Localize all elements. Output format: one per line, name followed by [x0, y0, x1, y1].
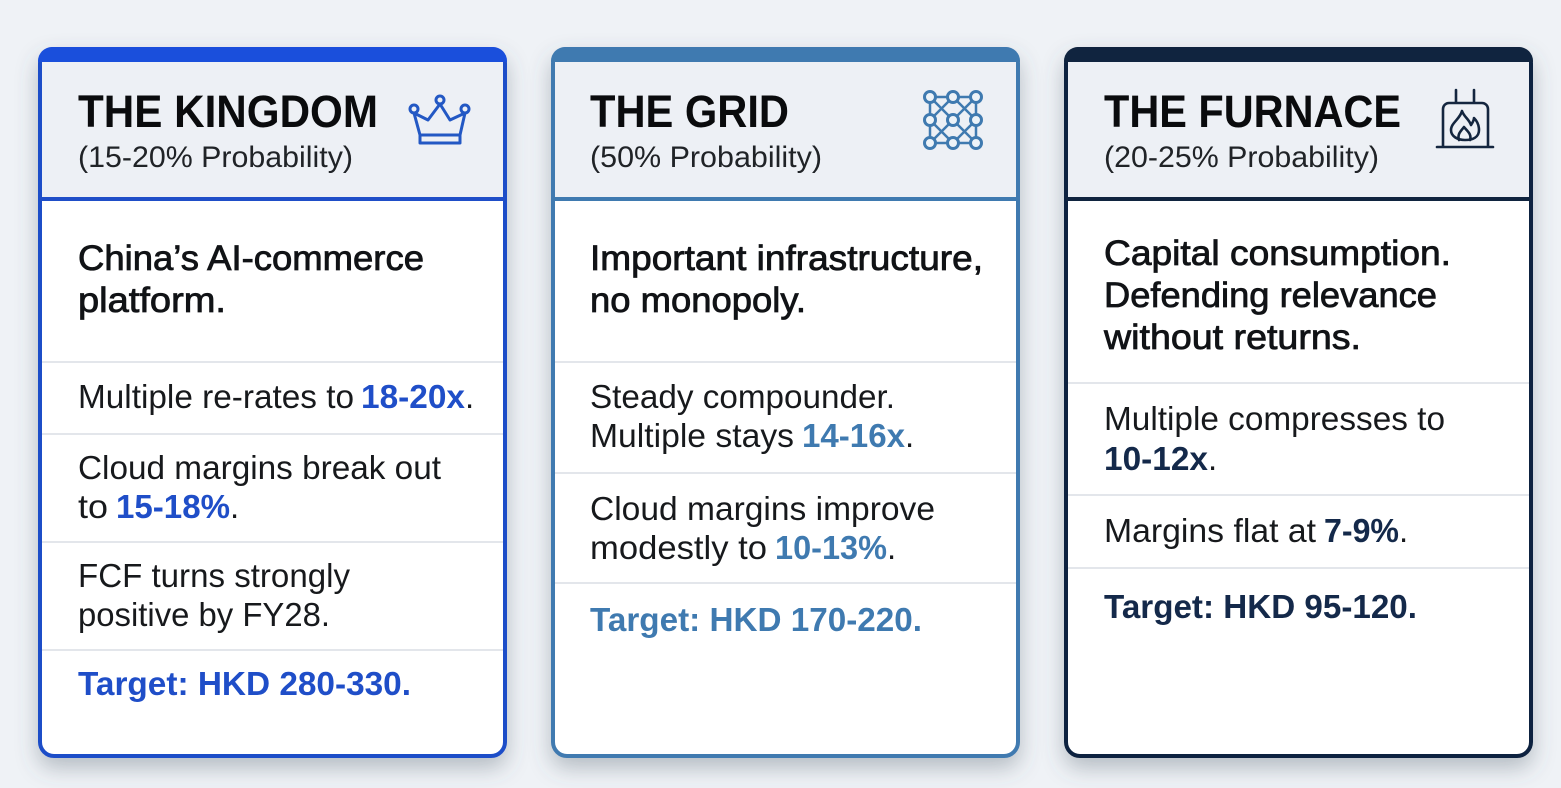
text: Grid target: Target: HKD 170-220. — [590, 601, 922, 638]
text: Furnace thesis — [1103, 234, 1451, 357]
text: Furnace multiple: . — [1208, 440, 1217, 477]
text: Kingdom cloud margins: 15-18% — [116, 488, 230, 525]
text: Furnace margins: 7-9% — [1324, 512, 1399, 549]
panel: The Kingdom — [38, 47, 507, 756]
text: Kingdom multiple: 18-20x — [361, 378, 466, 415]
text: Kingdom thesis: China’s AI-commerce — [78, 239, 424, 278]
text: Grid multiple: . — [905, 417, 914, 454]
text: Grid probability: (50% Probability) — [590, 141, 822, 174]
icon: network grid — [924, 92, 982, 148]
text: Kingdom multiple — [78, 378, 474, 415]
text: Furnace probability: (20-25% Probability) — [1104, 141, 1379, 174]
icon: furnace — [1437, 90, 1493, 147]
text: Kingdom FCF — [78, 557, 350, 633]
text: Kingdom cloud margins: . — [230, 488, 239, 525]
text: Furnace thesis: Capital consumption. — [1104, 234, 1451, 273]
text: Furnace margins: Margins flat at — [1104, 512, 1316, 549]
text: Grid thesis — [590, 239, 983, 320]
text: Furnace multiple: Multiple compresses to — [1104, 400, 1445, 437]
text: Grid cloud margins: modestly to — [590, 529, 767, 566]
text: Kingdom cloud margins: to — [78, 488, 108, 525]
icon: crown — [410, 96, 469, 143]
heading: The Furnace: THE FURNACE — [1104, 86, 1401, 137]
text: Grid thesis: Important infrastructure, — [590, 239, 983, 278]
text: Grid cloud margins: Cloud margins improve — [590, 490, 935, 527]
text: Kingdom FCF: positive by FY28. — [78, 596, 330, 633]
text: Kingdom target: Target: HKD 280-330. — [78, 665, 411, 702]
text: Grid multiple: Multiple stays — [590, 417, 794, 454]
text: Kingdom FCF: FCF turns strongly — [78, 557, 350, 594]
text: Kingdom cloud margins: Cloud margins break out — [78, 449, 441, 486]
text: Kingdom multiple: Multiple re-rates to — [78, 378, 354, 415]
text: Furnace multiple — [1104, 400, 1445, 477]
text: Furnace target: Target: HKD 95-120. — [1104, 588, 1417, 625]
heading: The Kingdom: THE KINGDOM — [78, 86, 378, 137]
text: Furnace multiple: 10-12x — [1104, 440, 1209, 477]
text: Grid multiple — [590, 378, 914, 454]
text: Furnace margins: . — [1399, 512, 1408, 549]
text: Furnace thesis: Defending relevance — [1104, 276, 1437, 315]
panel: The Furnace — [1064, 47, 1533, 756]
text: Grid cloud margins: . — [887, 529, 896, 566]
panel: The Grid — [551, 47, 1020, 756]
text: Kingdom thesis: platform. — [78, 281, 226, 320]
text: Kingdom probability: (15-20% Probability) — [78, 141, 353, 174]
text: Kingdom thesis — [78, 239, 424, 320]
text: Furnace margins — [1104, 512, 1408, 549]
text: Kingdom multiple: . — [465, 378, 474, 415]
text: Furnace thesis: without returns. — [1103, 318, 1361, 357]
text: Grid multiple: 14-16x — [802, 417, 906, 454]
text: Grid cloud margins: 10-13% — [775, 529, 887, 566]
text: Grid thesis: no monopoly. — [590, 281, 806, 320]
text: Grid cloud margins — [590, 490, 935, 566]
heading: The Grid: THE GRID — [590, 86, 789, 137]
text: Grid multiple: Steady compounder. — [590, 378, 895, 415]
text: Kingdom cloud margins — [78, 449, 441, 525]
